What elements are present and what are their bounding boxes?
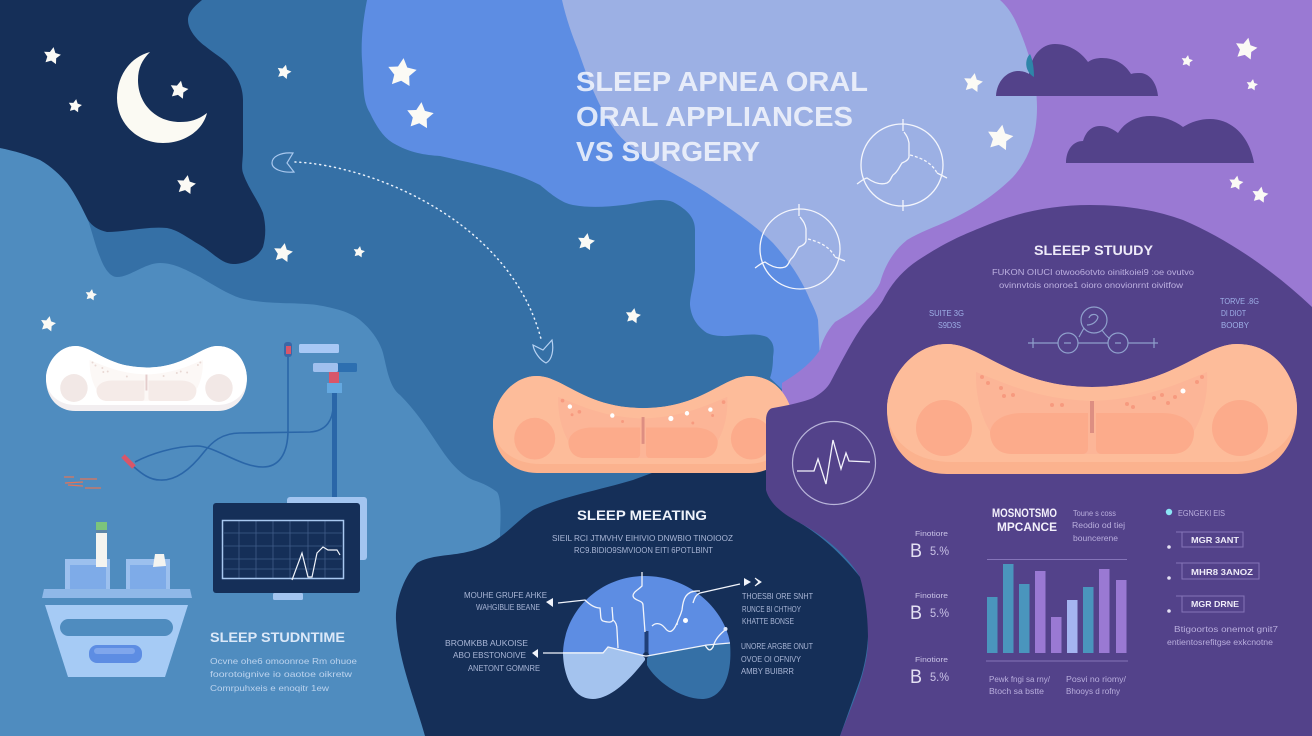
title [576, 66, 868, 167]
text blocks: lobed diagram labels: BROMKBB AUKOISE [445, 638, 528, 648]
text block: sleep meeating: SLEEP MEEATING [577, 507, 707, 523]
icon: jaw circle upper [857, 119, 947, 211]
text blocks: lobed diagram labels: ANETONT GOMNRE [468, 663, 540, 673]
cloud: lower [1066, 116, 1254, 163]
appliance: peach centre [493, 376, 793, 473]
stat list: left of bar chart: 5.% [930, 606, 949, 620]
background: light blue blob [0, 148, 501, 736]
legend [1166, 509, 1279, 647]
heading: monitoring importance [992, 508, 1057, 534]
icon: heartbeat circle [792, 422, 876, 504]
legend: Btigoortos onemot gnit7 [1174, 625, 1279, 634]
legend: MGR DRNE [1191, 599, 1239, 609]
title: ORAL APPLIANCES [576, 101, 853, 132]
sleep lab tray [42, 522, 192, 677]
cloud: upper [996, 44, 1158, 96]
stat list: left of bar chart: Finotiore [915, 591, 948, 600]
dotted arc arrow [272, 153, 553, 363]
stars [39, 35, 1269, 332]
stat list: left of bar chart: B [910, 603, 922, 624]
background: navy lower panel [396, 470, 868, 736]
sensor stand [123, 342, 357, 498]
title: VS SURGERY [576, 136, 760, 167]
legend: entientosrefitgse exkcnotne [1167, 638, 1274, 647]
sensor wires [134, 352, 333, 480]
orange dashes [64, 477, 101, 488]
text block: sleep study: ovinnvtois onoroe1 oioro onovionrnt oivitfow [999, 280, 1184, 290]
text block: sleep meeating: SIEIL RCI JTMVHV EIHIVIO DNWBIO TINOIOOZ [552, 533, 733, 543]
text blocks: lobed diagram labels: OVOE OI OFNIVY [741, 654, 801, 664]
stat list: left of bar chart: Finotiore [915, 529, 948, 538]
stat list: left of bar chart [910, 529, 949, 688]
monitor [213, 497, 367, 600]
text block: chart captions: Bhooys d rofny [1066, 687, 1120, 696]
text block: sleep study: S9D3S [938, 320, 961, 330]
appliance: white [46, 346, 247, 411]
text block: sleep study [929, 242, 1259, 330]
stat list: left of bar chart: 5.% [930, 670, 949, 684]
text blocks: lobed diagram labels: UNORE ARGBE ONUT [741, 641, 813, 651]
moon [117, 52, 207, 143]
legend: MGR 3ANT [1191, 535, 1240, 545]
text block: sleep study: BOOBY [1221, 320, 1249, 330]
stat list: left of bar chart: B [910, 667, 922, 688]
text blocks: lobed diagram labels: RUNCE BI CHTHOY [742, 604, 801, 614]
stat list: left of bar chart: Finotiore [915, 655, 948, 664]
diagram: node network [1028, 307, 1158, 353]
bar chart [986, 560, 1128, 661]
text block: sleep study: FUKON OIUCI otwoo6otvto oinitkoiei9 :oe ovutvo [992, 267, 1194, 277]
text blocks: lobed diagram labels: ABO EBSTONOIVE [453, 650, 526, 660]
text blocks: lobed diagram labels: KHATTE BONSE [742, 616, 794, 626]
background: periwinkle blob [362, 0, 900, 500]
text blocks: lobed diagram labels: MOUHE GRUFE AHKE [464, 590, 547, 600]
text block: sleep studntime: SLEEP STUDNTIME [210, 630, 345, 645]
text block: sleep meeating: RC9.BIDIO9SMVIOON EITI 6POTLBINT [574, 545, 713, 555]
text blocks: lobed diagram labels: WAHGIBLIE BEANE [476, 602, 540, 612]
text block: sleep meeating [552, 507, 733, 555]
heading: monitoring importance: MPCANCE [997, 522, 1057, 534]
chart: lobed diagram [532, 572, 761, 699]
text block: sleep studntime: Comrpuhxeis e enoqitr 1ew [210, 683, 330, 693]
text block: chart note [1072, 509, 1125, 543]
background: purple blob [780, 0, 1312, 520]
text block: sleep study: SLEEEP STUUDY [1034, 242, 1154, 258]
text block: sleep studntime [210, 630, 357, 693]
icon: jaw circle lower [755, 204, 845, 289]
panel: dark purple study [766, 205, 1312, 736]
text block: chart note: bouncerene [1073, 534, 1119, 543]
text block: chart captions: Posvi no riomy/ [1066, 675, 1127, 684]
text block: sleep study: SUITE 3G [929, 308, 964, 318]
heading: monitoring importance: MOSNOTSMO [992, 508, 1057, 520]
text block: chart captions [989, 675, 1127, 696]
text block: chart captions: Btoch sa bstte [989, 687, 1045, 696]
appliance: peach large [887, 344, 1297, 474]
background: navy night sky [0, 0, 265, 264]
legend: EGNGEKI EIS [1178, 509, 1225, 518]
stat list: left of bar chart: B [910, 541, 922, 562]
background: pale periwinkle blob [562, 0, 1100, 360]
title: SLEEP APNEA ORAL [576, 66, 868, 97]
text block: chart note: Reodio od tiej [1072, 521, 1125, 530]
text blocks: lobed diagram labels: THOESBI ORE SNHT [742, 591, 813, 601]
text block: sleep studntime: foorotoignive io oaotoe oikretw [210, 669, 353, 679]
text block: sleep study: DI DIOT [1221, 308, 1246, 318]
text blocks: lobed diagram labels [445, 590, 813, 676]
text block: sleep studntime: Ocvne ohe6 omoonroe Rm ohuoe [210, 656, 357, 666]
legend: MHR8 3ANOZ [1191, 567, 1253, 577]
text block: sleep study: TORVE .8G [1220, 296, 1259, 306]
text block: chart captions: Pewk fngi sa rny/ [989, 675, 1051, 684]
text blocks: lobed diagram labels: AMBY BUIBRR [741, 666, 794, 676]
stat list: left of bar chart: 5.% [930, 544, 949, 558]
text block: chart note: Toune s coss [1073, 509, 1116, 518]
